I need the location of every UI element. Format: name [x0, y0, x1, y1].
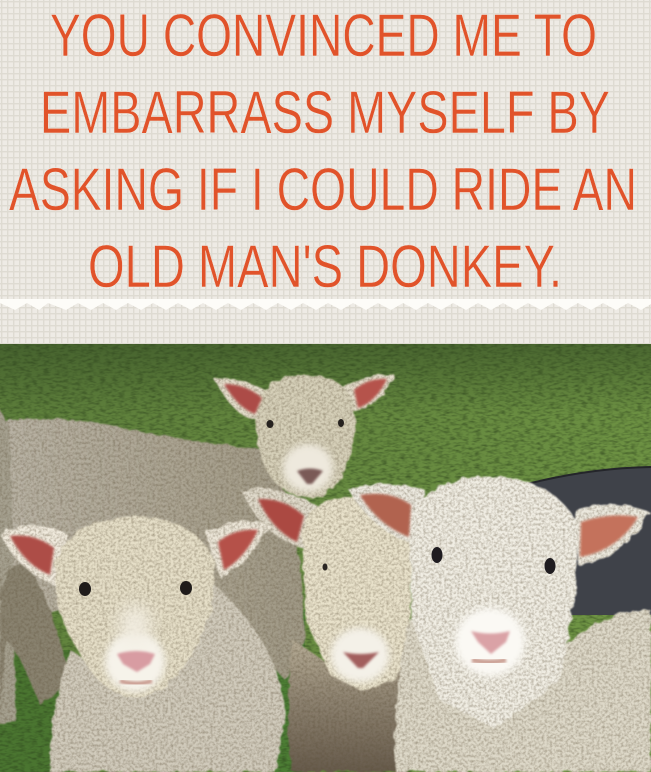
nose [343, 652, 379, 668]
grass background [0, 344, 651, 772]
nose [117, 651, 155, 672]
textured header panel [0, 0, 651, 344]
black tub [527, 467, 651, 615]
nose [297, 468, 323, 484]
lamb: middle [241, 489, 412, 772]
photo of lambs [0, 344, 651, 772]
back lamb body [0, 390, 305, 725]
lamb: front left [0, 516, 285, 772]
white zigzag divider [0, 299, 651, 310]
nose [471, 631, 510, 654]
lamb: front right [348, 476, 651, 772]
title [9, 2, 637, 300]
lamb: back head [214, 375, 395, 497]
